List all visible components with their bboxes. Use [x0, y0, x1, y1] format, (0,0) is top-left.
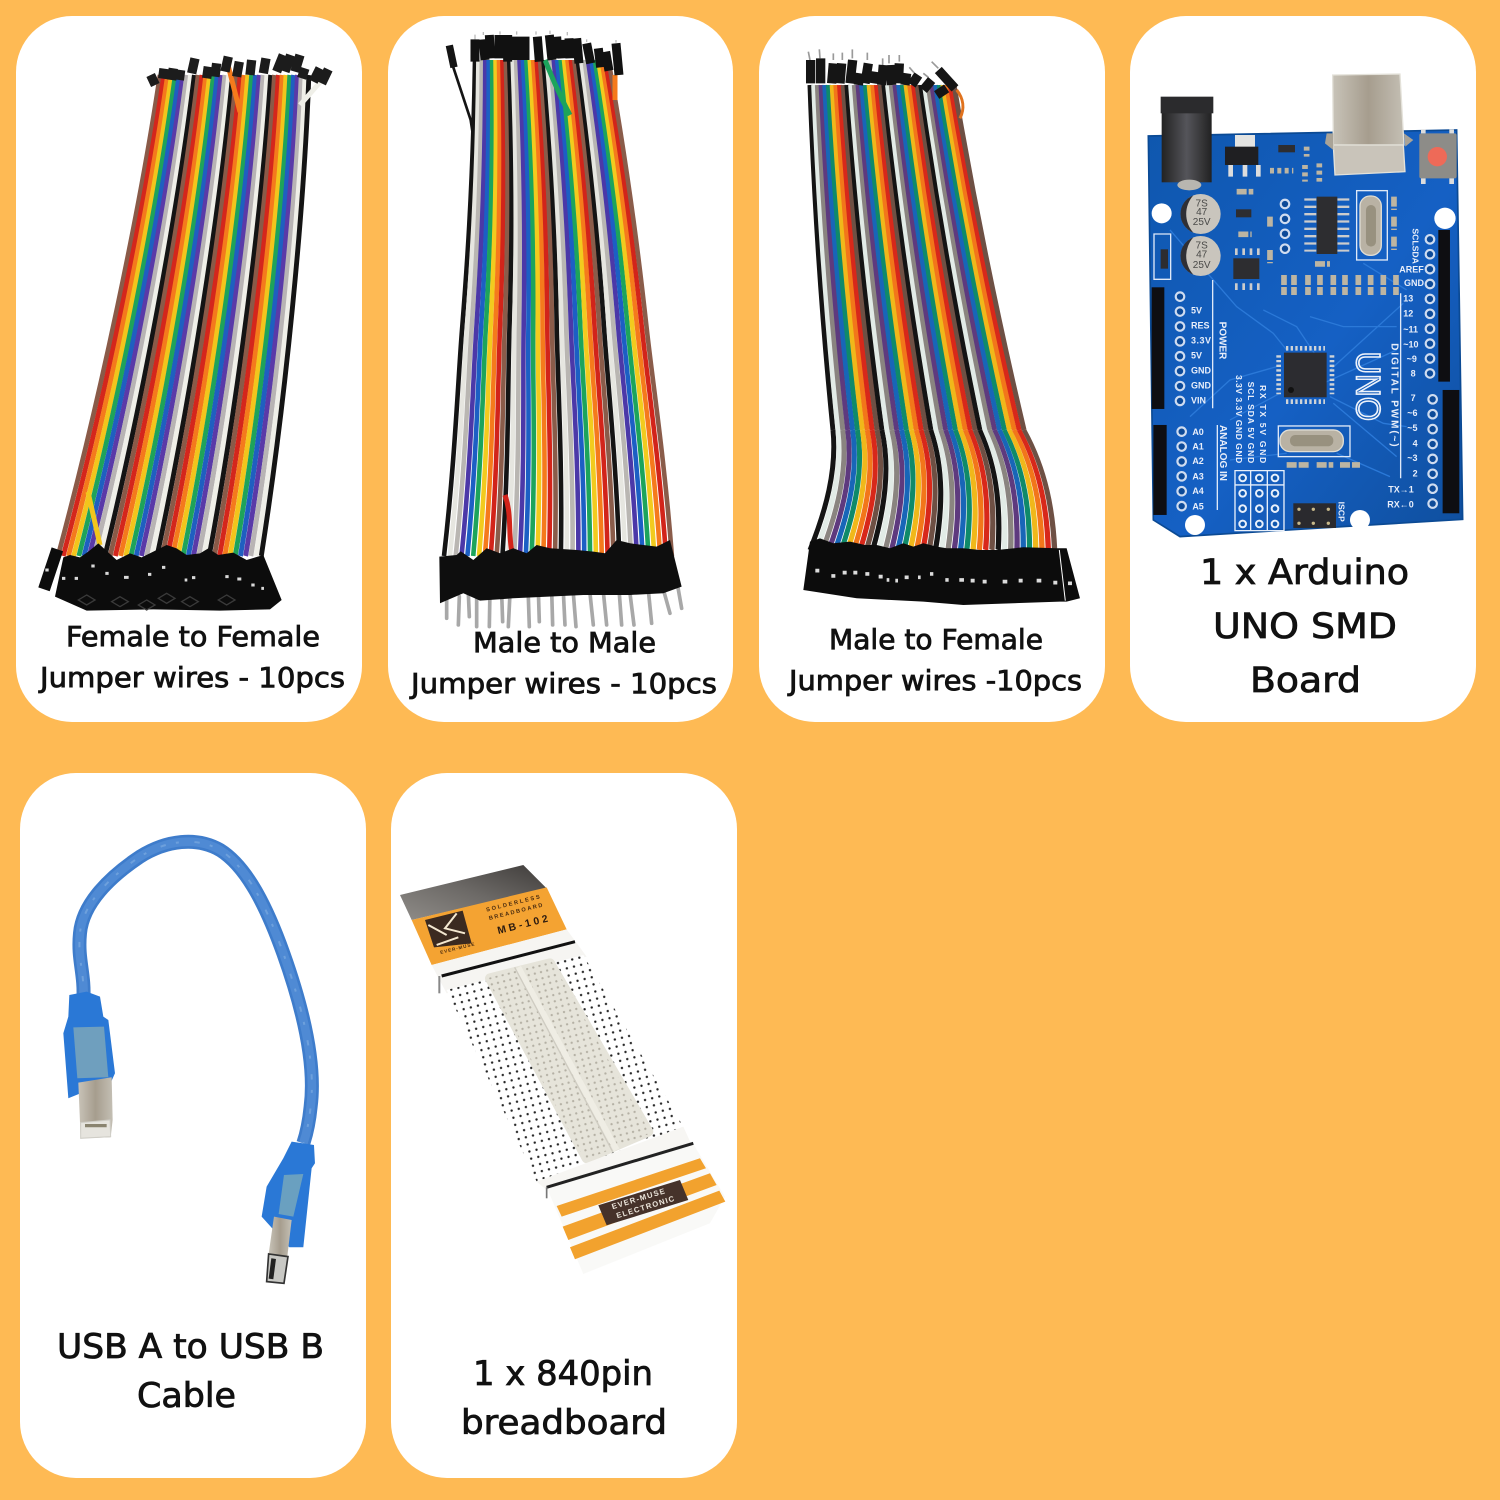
top connectors [151, 55, 328, 85]
small resistors and capacitors [1270, 197, 1396, 295]
crossing wires [505, 60, 615, 552]
card [20, 773, 366, 1478]
bottom connectors and pins [439, 540, 682, 627]
traces [1170, 230, 1407, 477]
silkscreen labels: 4 [1413, 439, 1418, 449]
crossing wires [88, 65, 322, 545]
caption: Male to Male [473, 627, 656, 659]
circuit board [1148, 130, 1463, 537]
silkscreen labels: ANALOG IN [1217, 425, 1228, 481]
panel: male to female jumper wires [759, 16, 1105, 722]
silkscreen labels: A4 [1192, 486, 1204, 496]
caption: Jumper wires - 10pcs [38, 662, 345, 694]
silkscreen labels: TX→1 [1388, 485, 1414, 495]
silkscreen labels: VIN [1191, 395, 1206, 405]
silkscreen labels: RX←0 [1387, 499, 1414, 509]
boxed breadboard illustration: EVER-MUSE [611, 1187, 666, 1211]
USB interface chip [1310, 198, 1343, 252]
boxed breadboard illustration: MB-102 [496, 914, 549, 937]
silkscreen labels: A0 [1192, 427, 1204, 437]
silkscreen labels: AREF [1399, 265, 1424, 275]
dotted cardboard [447, 955, 683, 1182]
electrolytic capacitors: 25V [1193, 217, 1211, 228]
reset button [1419, 133, 1457, 178]
USB A plug [262, 1142, 315, 1247]
panel: Arduino UNO board [1130, 16, 1476, 722]
electrolytic capacitors: 7S [1196, 241, 1208, 252]
caption [1200, 553, 1409, 701]
electrolytic capacitors: 7S [1196, 199, 1208, 210]
caption: 1 x Arduino [1200, 553, 1409, 593]
silkscreen labels: A3 [1192, 471, 1204, 481]
cable [79, 842, 312, 1143]
silkscreen labels: RES [1191, 320, 1209, 330]
top connectors and pins [808, 49, 963, 118]
crystal bottom [1278, 426, 1350, 457]
caption [787, 624, 1082, 697]
silkscreen labels: 12 [1403, 309, 1413, 319]
caption: Jumper wires -10pcs [787, 665, 1082, 697]
boxed breadboard illustration: SOLDERLESS [486, 894, 541, 914]
USB B plug [63, 992, 115, 1098]
silkscreen labels: ~5 [1407, 423, 1418, 433]
silkscreen labels: 3.3V [1191, 335, 1211, 345]
silkscreen labels: DIGITAL PWM(~) [1389, 343, 1400, 447]
label plate [598, 1180, 688, 1225]
caption: Cable [137, 1376, 236, 1415]
silkscreen labels: 13 [1403, 294, 1413, 304]
caption: breadboard [461, 1403, 667, 1442]
silkscreen labels [1191, 228, 1424, 522]
silkscreen labels: SCLSDA [1411, 228, 1421, 265]
caption: 1 x 840pin [473, 1354, 653, 1393]
silkscreen labels: A1 [1192, 441, 1204, 451]
caption: UNO SMD [1213, 607, 1397, 647]
caption [38, 621, 345, 694]
grey box top [400, 865, 547, 920]
electrolytic capacitors: 25V [1193, 260, 1211, 271]
silkscreen labels: GND [1191, 380, 1211, 390]
boxed breadboard illustration: BREADBOARD [488, 903, 543, 922]
boxed breadboard illustration: ELECTRONIC [615, 1194, 676, 1220]
wire bundle: 40 rainbow wires [444, 60, 703, 556]
wire bundle: 40 rainbow wires [58, 75, 363, 556]
orange stripes [557, 1158, 706, 1217]
silkscreen labels: ISCP [1336, 502, 1346, 522]
breadboard window [490, 963, 648, 1158]
card [759, 16, 1105, 722]
lower sleeve [537, 1127, 692, 1190]
orange label [412, 887, 567, 965]
silkscreen labels: 5V [1191, 305, 1202, 315]
caption: USB A to USB B [57, 1327, 324, 1366]
bottom connectors [44, 543, 282, 611]
caption [57, 1327, 324, 1415]
crystal top [1357, 191, 1387, 260]
silkscreen labels: ~3 [1407, 453, 1418, 463]
ISP headers [1293, 503, 1336, 528]
silkscreen labels: ~10 [1403, 339, 1419, 349]
silkscreen labels: A2 [1192, 456, 1204, 466]
caption [461, 1354, 667, 1442]
caption: Jumper wires - 10pcs [409, 668, 717, 700]
silkscreen labels: 5V [1191, 350, 1202, 360]
white breakout pads [1235, 471, 1284, 531]
sleeve [432, 929, 587, 993]
silkscreen labels: 2 [1413, 469, 1418, 479]
card [388, 16, 733, 722]
silkscreen labels: SCL SDA 5V GND [1246, 382, 1256, 463]
card [1130, 16, 1476, 722]
boxed breadboard illustration: EVER-MUSE [440, 942, 475, 955]
DC power jack [1162, 112, 1212, 182]
solder pads [1180, 204, 1433, 508]
USB cable illustration [63, 842, 315, 1283]
silkscreen labels: 7 [1411, 393, 1416, 403]
caption [409, 627, 717, 700]
panel: female to female jumper wires [16, 16, 363, 722]
caption: Board [1250, 661, 1361, 701]
electrolytic capacitors: 47 [1196, 249, 1208, 260]
top connectors [449, 31, 619, 133]
electrolytic capacitors: 47 [1196, 207, 1208, 218]
wire bundle: 40 rainbow wires [810, 85, 1078, 550]
microcontroller [1279, 348, 1332, 402]
silkscreen labels: POWER [1216, 322, 1227, 359]
silkscreen labels: ~9 [1407, 354, 1417, 364]
card [16, 16, 362, 722]
Arduino board illustration [1148, 74, 1463, 537]
silkscreen labels: ~11 [1403, 325, 1418, 335]
pin headers [1152, 230, 1459, 515]
silkscreen labels: RX TX 5V GND [1258, 385, 1268, 463]
boxed breadboard illustration [400, 865, 725, 1274]
silkscreen lines [1154, 234, 1401, 510]
silkscreen labels: 8 [1411, 369, 1416, 379]
card [391, 773, 737, 1478]
silkscreen labels: ~6 [1407, 408, 1418, 418]
silkscreen labels: GND [1404, 278, 1424, 288]
caption: Female to Female [66, 621, 320, 653]
UNO logo: UNO [1349, 352, 1387, 421]
panel: male to male jumper wires [388, 16, 733, 722]
silkscreen labels: GND [1191, 365, 1211, 375]
electrolytic capacitors [1181, 194, 1221, 276]
panel: breadboard [391, 773, 737, 1478]
caption: Male to Female [829, 624, 1043, 656]
USB connector [1333, 74, 1404, 145]
silkscreen labels: 3.3V 3.3V GND GND [1234, 375, 1244, 463]
voltage regulator [1235, 135, 1255, 147]
panel: USB cable [20, 773, 366, 1478]
bottom connectors [803, 538, 1080, 605]
mounting holes [1152, 203, 1456, 535]
silkscreen labels: A5 [1192, 501, 1204, 511]
small chips [1161, 145, 1295, 279]
